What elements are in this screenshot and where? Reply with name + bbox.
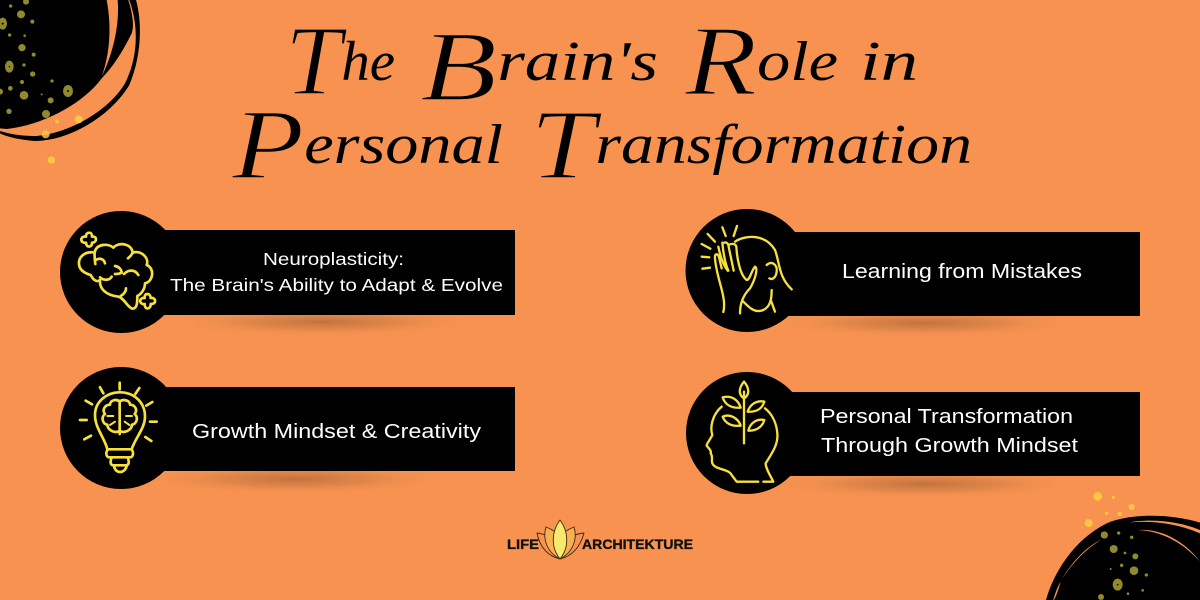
panel: neuroplasticity xyxy=(60,211,515,336)
title: P xyxy=(231,89,304,200)
icon: light bulb with brain xyxy=(80,383,157,472)
title: T xyxy=(285,5,348,116)
logo: life architekture: ARCHITEKTURE xyxy=(582,536,693,552)
title xyxy=(231,5,972,200)
icon: lotus xyxy=(537,520,584,559)
title: T xyxy=(530,89,603,200)
text: personal transformation xyxy=(820,406,1079,457)
text: personal transformation: Through Growth Mindset xyxy=(821,435,1079,457)
title: ersonal xyxy=(304,114,503,176)
brush circle: bottom right xyxy=(1046,492,1200,600)
text: personal transformation: Personal Transformation xyxy=(820,406,1073,428)
icon: brain with sparkles xyxy=(79,233,155,309)
title: ole xyxy=(757,31,838,93)
text: neuroplasticity: The Brain's Ability to Adapt & Evolve xyxy=(170,275,503,295)
title: ransformation xyxy=(595,114,972,176)
logo: life architekture: LIFE xyxy=(507,536,539,552)
panel: learning from mistakes xyxy=(686,209,1140,337)
icon: head with growing plant xyxy=(707,382,777,482)
icon: hand on forehead xyxy=(702,226,792,313)
brush circle: top left xyxy=(0,0,140,164)
title: B xyxy=(420,11,497,122)
panel: personal transformation xyxy=(686,372,1140,498)
title: rain's xyxy=(497,31,658,93)
title: in xyxy=(860,31,918,93)
text: growth mindset: Growth Mindset & Creativity xyxy=(192,421,481,443)
text: learning from mistakes: Learning from Mistakes xyxy=(842,261,1082,283)
text: neuroplasticity xyxy=(170,249,503,295)
title: R xyxy=(684,5,757,116)
logo: life architekture xyxy=(507,520,693,559)
text: neuroplasticity: Neuroplasticity: xyxy=(263,249,404,269)
title: he xyxy=(341,31,395,93)
panel: growth mindset and creativity xyxy=(60,367,515,494)
